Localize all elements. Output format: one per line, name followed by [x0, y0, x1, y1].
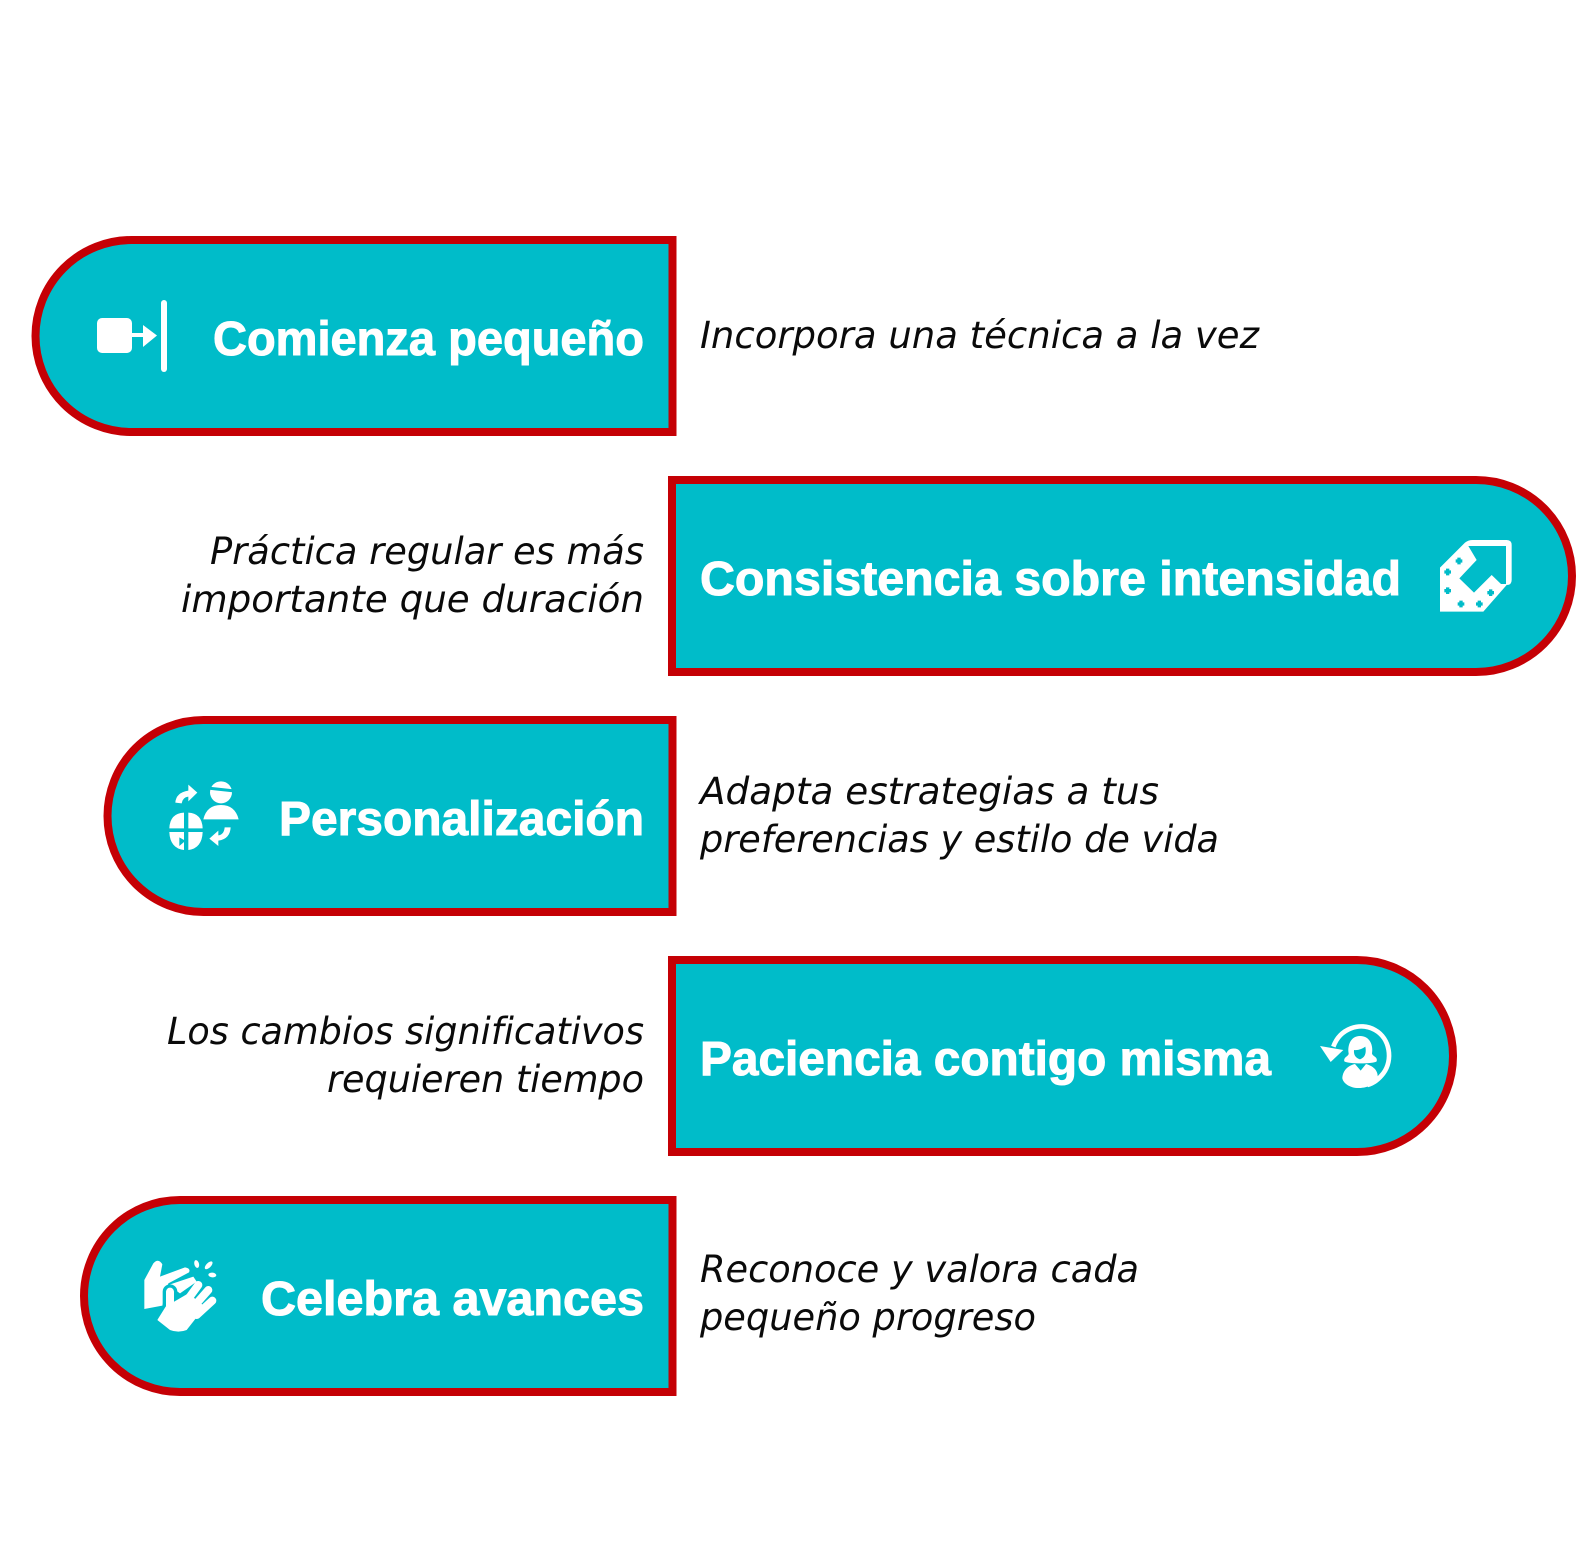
row 3: Personalización [108, 720, 1219, 912]
pill: Paciencia contigo misma [672, 960, 1453, 1152]
description: Práctica regular es más importante que duración [181, 530, 644, 621]
description: Adapta estrategias a tus preferencias y estilo de vida [698, 770, 1219, 861]
description: Adapta estrategias a tus preferencias y estilo de vida: Adapta estrategias a tus [698, 770, 1159, 813]
heading: Paciencia contigo misma: Paciencia contigo misma [700, 1033, 1271, 1086]
heading: Celebra avances: Celebra avances [261, 1273, 644, 1326]
description: Adapta estrategias a tus preferencias y estilo de vida: preferencias y estilo de vida [699, 818, 1219, 861]
pill: Comienza pequeño [36, 240, 673, 432]
description: Reconoce y valora cada pequeño progreso: Reconoce y valora cada [700, 1248, 1139, 1291]
heading: Comienza pequeño: Comienza pequeño [213, 313, 644, 366]
row 1: Comienza pequeño [36, 240, 1261, 432]
row 5: Celebra avances [84, 1200, 1139, 1392]
row 2: Consistencia sobre intensidad [181, 480, 1572, 672]
row 4: Paciencia contigo misma [167, 960, 1453, 1152]
icon: box moving to line [97, 300, 167, 372]
description: Reconoce y valora cada pequeño progreso [699, 1248, 1139, 1339]
pill: Consistencia sobre intensidad [672, 480, 1572, 672]
icon: person and brain exchange [169, 781, 239, 850]
pill: Celebra avances [84, 1200, 672, 1392]
description: Los cambios significativos requieren tiempo [167, 1010, 644, 1101]
description: Los cambios significativos requieren tiempo: Los cambios significativos [167, 1010, 644, 1053]
description: Reconoce y valora cada pequeño progreso: pequeño progreso [699, 1296, 1036, 1339]
description: Los cambios significativos requieren tiempo: requieren tiempo [327, 1058, 644, 1101]
icon: pencil note [1440, 540, 1512, 612]
description: Incorpora una técnica a la vez: Incorpora una técnica a la vez [700, 314, 1261, 357]
icon: clapping hands [144, 1260, 217, 1332]
heading: Consistencia sobre intensidad: Consistencia sobre intensidad [700, 553, 1401, 606]
description: Práctica regular es más importante que duración: importante que duración [181, 578, 644, 621]
heading: Personalización: Personalización [279, 793, 644, 846]
icon: woman with return arrow [1320, 1026, 1389, 1088]
description: Práctica regular es más importante que duración: Práctica regular es más [210, 530, 644, 573]
pill: Personalización [108, 720, 673, 912]
